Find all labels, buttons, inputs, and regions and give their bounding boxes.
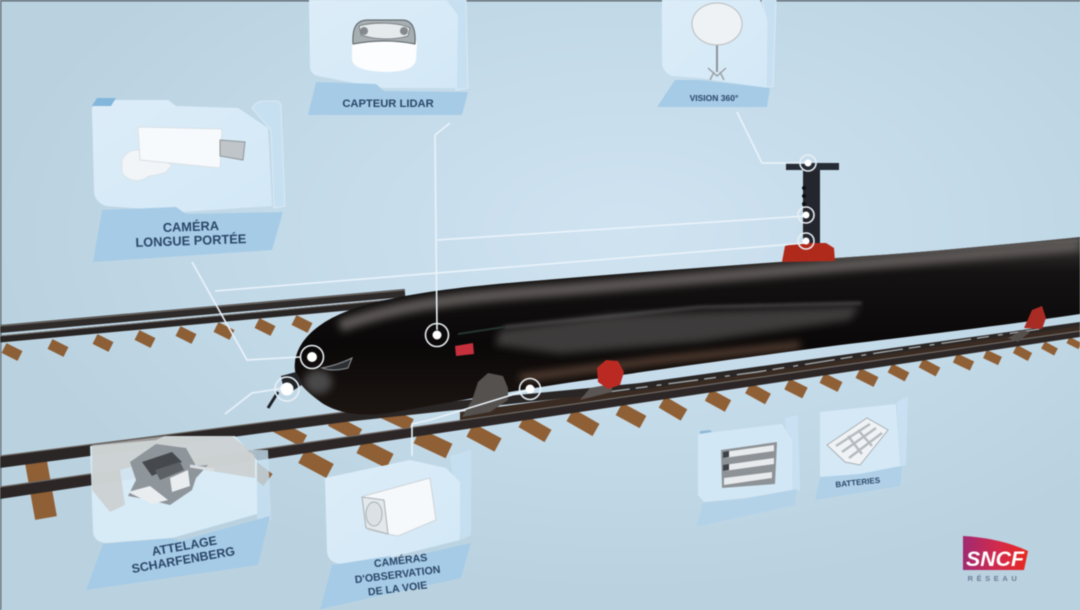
red wheel bbox=[580, 360, 624, 400]
label band: CAMÉRAS bbox=[373, 551, 428, 570]
sensor mast bbox=[782, 163, 839, 262]
connector lines bbox=[192, 112, 808, 456]
logo: SNCF Réseau: RÉSEAU bbox=[968, 574, 1020, 583]
body sheen bbox=[304, 240, 1080, 394]
stripe accent bbox=[92, 98, 116, 106]
coupler nose bbox=[268, 372, 303, 408]
rail gap shadow bbox=[460, 325, 1080, 424]
label band: CAPTEUR LIDAR bbox=[342, 98, 434, 110]
icon: coupler bbox=[128, 444, 214, 505]
grey wheel bbox=[462, 373, 508, 417]
label band bbox=[696, 489, 797, 527]
logo: SNCF Réseau: SNCF bbox=[966, 548, 1025, 571]
logo: SNCF Réseau bbox=[963, 536, 1028, 583]
label band: ATTELAGE bbox=[151, 533, 218, 559]
label band: VISION 360° bbox=[690, 93, 739, 103]
train body bbox=[295, 237, 1080, 417]
front railway track bbox=[0, 322, 1080, 518]
red marker bbox=[455, 343, 474, 356]
icon: battery pack bbox=[827, 418, 888, 465]
label band: BATTERIES bbox=[835, 476, 881, 489]
rail gleams bbox=[600, 329, 1040, 393]
red rear bump bbox=[1008, 306, 1046, 342]
panel: batteries bbox=[815, 396, 908, 500]
icon: 360 mirror bbox=[692, 3, 742, 80]
icon: lidar sensor bbox=[352, 20, 417, 72]
label band: SCHARFENBERG bbox=[131, 544, 236, 576]
rails bbox=[0, 322, 1080, 499]
label band: LONGUE PORTÉE bbox=[135, 231, 247, 250]
label band bbox=[93, 207, 283, 262]
panel: serveurs bbox=[696, 415, 800, 527]
label band bbox=[86, 516, 270, 590]
panel: capteur lidar bbox=[308, 0, 468, 115]
panel: vision 360 bbox=[657, 0, 776, 107]
panel: attelage scharfenberg bbox=[86, 436, 271, 590]
label band bbox=[308, 82, 468, 115]
panel: caméras d'observation de la voie bbox=[320, 450, 471, 610]
label band: D'OBSERVATION bbox=[354, 564, 441, 586]
panel: caméra longue portée bbox=[92, 98, 285, 262]
back railway track bbox=[0, 290, 405, 356]
label band bbox=[320, 543, 471, 610]
label band: CAMÉRA bbox=[163, 218, 219, 235]
icon: observation camera bbox=[362, 478, 436, 536]
icon: long range camera bbox=[122, 127, 245, 180]
marker dots bbox=[275, 155, 816, 401]
label band: DE LA VOIE bbox=[367, 579, 428, 599]
icon: server racks bbox=[721, 442, 777, 488]
sleepers bbox=[36, 340, 1080, 518]
headlight bbox=[322, 358, 352, 370]
